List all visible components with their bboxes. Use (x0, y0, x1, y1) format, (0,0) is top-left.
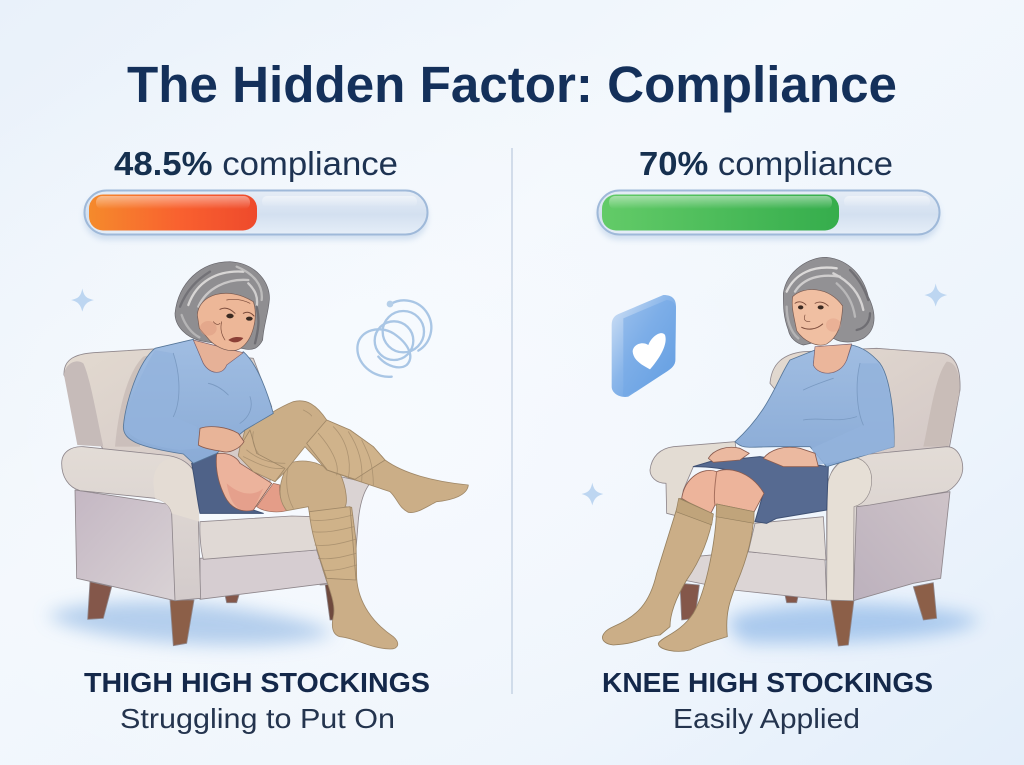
spring icon (357, 300, 431, 377)
caption: left heading: THIGH HIGH STOCKINGS (84, 667, 430, 698)
sweater (735, 345, 894, 467)
face (792, 290, 843, 345)
label: left compliance: 48.5% compliance (114, 145, 398, 182)
caption: right sub: Easily Applied (673, 703, 860, 734)
illustration: woman comfortably wearing knee high stockings (582, 257, 980, 651)
progress bar: left 48.5% (84, 190, 428, 240)
hand (198, 427, 244, 452)
knees (682, 470, 764, 515)
floor shadow (729, 603, 980, 644)
caption: left sub: Struggling to Put On (120, 703, 395, 734)
floor shadow (47, 601, 333, 645)
label: right compliance: 70% compliance (639, 145, 893, 182)
chair (62, 349, 370, 646)
hair (783, 257, 874, 345)
caption: right heading: KNEE HIGH STOCKINGS (602, 667, 933, 698)
sparkle: upper right (924, 283, 947, 307)
face (197, 293, 255, 351)
hair (175, 262, 269, 349)
stockings (602, 498, 754, 651)
progress bar: right 70% (597, 190, 940, 240)
sweater (123, 339, 273, 463)
far leg bare thigh (257, 483, 287, 512)
sparkle: lower left (582, 483, 603, 505)
hands (708, 447, 749, 462)
neck (813, 344, 852, 373)
sparkle (71, 288, 94, 312)
raised leg with bunched stocking (238, 401, 468, 513)
near bare thigh (216, 453, 272, 511)
chair (650, 348, 963, 646)
illustration: woman struggling with thigh high stockings (47, 262, 468, 649)
title: The Hidden Factor: Compliance (127, 56, 897, 113)
heart tile icon (612, 295, 676, 397)
lower leg with bunched stocking (280, 461, 398, 649)
neck (193, 340, 243, 372)
skirt (693, 457, 828, 523)
skirt (192, 452, 263, 513)
